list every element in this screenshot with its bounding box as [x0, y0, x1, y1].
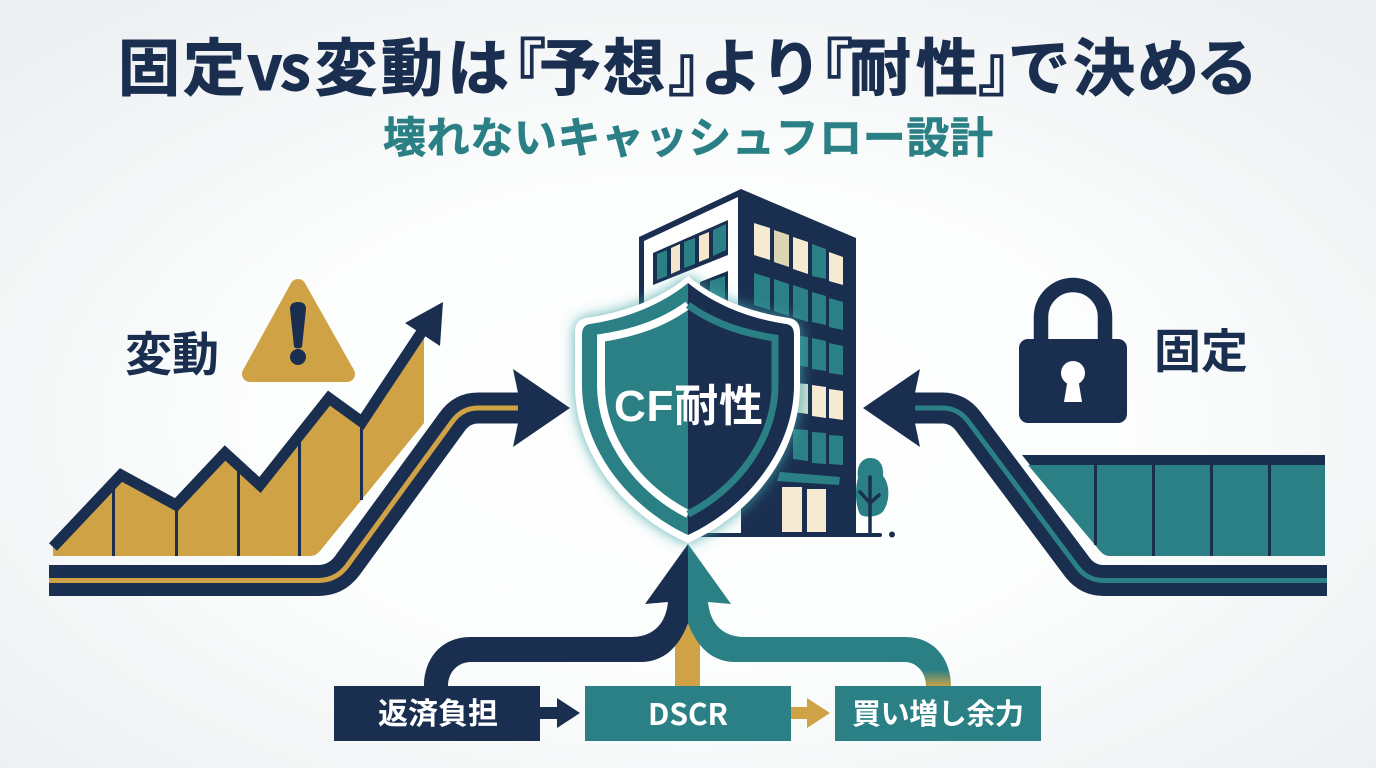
arrow: DSCR gold shaft	[675, 622, 700, 686]
arrow: navy repayment curve	[424, 544, 688, 686]
icon: office building	[639, 189, 895, 538]
shield label: CF耐性	[614, 382, 763, 431]
icon: tree	[856, 458, 888, 533]
flow: DSCR box	[585, 686, 791, 741]
title: 固定vs変動は『予想』より『耐性』で決める	[118, 18, 1258, 108]
icon: warning triangle	[250, 287, 347, 374]
subtitle: 壊れないキャッシュフロー設計	[383, 104, 993, 166]
flow: repayment box	[334, 686, 540, 741]
label: fixed: 固定	[1154, 313, 1248, 382]
icon: padlock	[1019, 285, 1127, 423]
arrow: DSCR to capacity	[791, 698, 830, 728]
panel: fixed rate	[863, 285, 1327, 580]
arrows: three inputs rising to shield	[424, 544, 951, 686]
flow: repayment box: 返済負担	[378, 689, 498, 733]
arrow: teal capacity curve	[688, 544, 951, 686]
panel: variable rate	[49, 287, 570, 580]
flow: purchase capacity box: 買い増し余力	[852, 691, 1024, 733]
arrow: repayment to DSCR	[540, 698, 580, 728]
chart: rising area	[53, 302, 443, 556]
chart: flat block	[1022, 455, 1325, 556]
flow: purchase capacity box	[835, 686, 1041, 741]
label: variable: 変動	[125, 316, 219, 385]
arrow: fixed flow into shield	[863, 369, 1327, 580]
shield: CF resilience	[575, 276, 800, 543]
arrow: variable flow into shield	[49, 369, 570, 580]
flow: DSCR box: DSCR	[648, 690, 728, 734]
